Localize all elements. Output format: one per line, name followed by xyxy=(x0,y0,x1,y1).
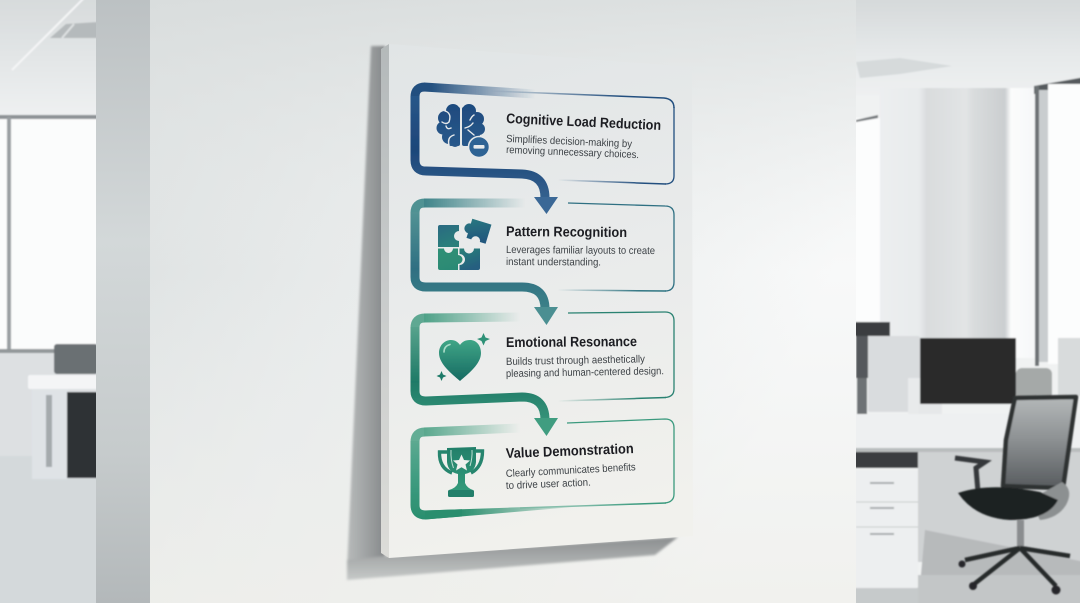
description: pleasing and human-centered design. xyxy=(506,365,664,380)
title: Cognitive Load Reduction xyxy=(506,110,661,133)
description xyxy=(506,133,639,161)
left office background xyxy=(0,0,100,603)
description xyxy=(506,461,636,492)
office chair xyxy=(955,397,1076,594)
title: Pattern Recognition xyxy=(506,223,627,240)
icon: heart with sparkles xyxy=(436,333,490,381)
title: Value Demonstration xyxy=(506,440,634,461)
arrow xyxy=(534,197,558,214)
arrow xyxy=(534,307,558,325)
panel: pattern recognition xyxy=(415,203,674,325)
description xyxy=(506,353,664,380)
poster side edge xyxy=(381,44,389,558)
panel: cognitive load reduction xyxy=(415,87,674,214)
description xyxy=(506,244,655,268)
panel: emotional resonance xyxy=(415,312,674,436)
description: Leverages familiar layouts to create xyxy=(506,244,655,257)
right office background xyxy=(850,0,1080,603)
panel: value demonstration xyxy=(415,419,674,520)
title: Emotional Resonance xyxy=(506,333,637,350)
poster shadow xyxy=(347,46,678,580)
icon: puzzle xyxy=(438,217,491,270)
description: removing unnecessary choices. xyxy=(506,144,639,161)
description: Builds trust through aesthetically xyxy=(506,353,646,368)
description: Simplifies decision-making by xyxy=(506,133,633,150)
description: Clearly communicates benefits xyxy=(506,461,636,480)
icon: brain with minus xyxy=(436,104,490,158)
poster face xyxy=(389,44,693,558)
description: to drive user action. xyxy=(506,477,591,492)
pillar xyxy=(96,0,150,603)
arrow xyxy=(534,418,558,436)
poster xyxy=(381,44,693,558)
description: instant understanding. xyxy=(506,256,601,268)
icon: trophy xyxy=(439,447,482,497)
wall xyxy=(150,0,856,603)
